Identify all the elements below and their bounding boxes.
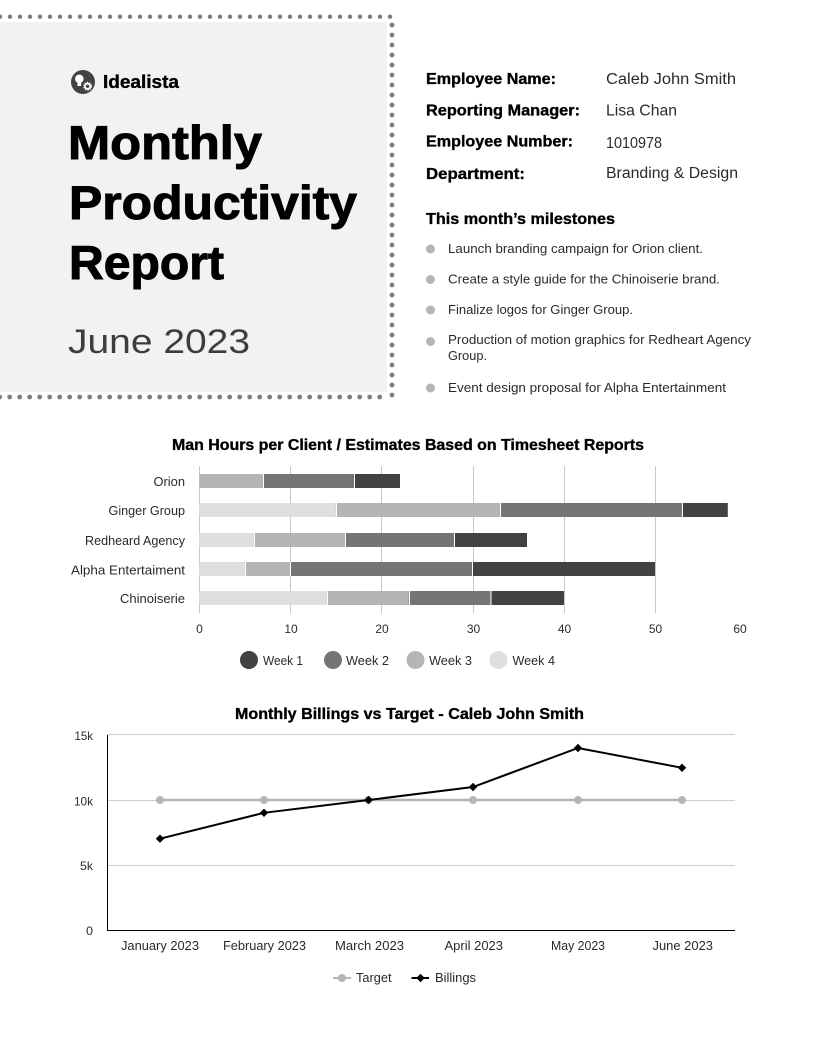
bar: Ginger Group [108, 503, 728, 518]
series: target [156, 796, 686, 804]
x axis labels: 30 [467, 622, 480, 636]
x axis labels: January 2023 [121, 939, 199, 953]
y axis labels [74, 729, 94, 938]
heading: man hours chart: Man Hours per Client / Estimates Based on Timesheet Reports [172, 437, 644, 454]
legend: target and billings [333, 971, 476, 985]
heading: billings chart: Monthly Billings vs Target - Caleb John Smith [235, 706, 584, 723]
milestones list: Launch branding campaign for Orion client. [448, 242, 703, 256]
x axis labels: February 2023 [223, 939, 306, 953]
legend: target and billings: Billings [435, 971, 476, 985]
x axis labels [196, 622, 747, 636]
stacked bar chart: man hours per client [71, 466, 747, 636]
bar: Chinoiserie [120, 591, 564, 606]
employee details: Caleb John Smith [606, 71, 736, 88]
header panel [0, 17, 392, 397]
legend: weeks: Week 2 [346, 654, 389, 668]
title: Monthly [68, 116, 262, 169]
employee details: Employee Number: [426, 134, 573, 151]
x axis labels: 20 [375, 622, 389, 636]
bar: Redheard Agency [85, 533, 527, 548]
y axis labels: 10k [74, 794, 94, 808]
line chart: monthly billings vs target [74, 729, 735, 953]
milestones list: Create a style guide for the Chinoiserie brand. [448, 272, 720, 286]
milestones list: Event design proposal for Alpha Entertainment [448, 381, 727, 395]
x axis labels: 0 [196, 622, 203, 636]
title: Report [69, 236, 224, 289]
employee details: 1010978 [606, 135, 662, 152]
bar: Alpha Entertaiment [71, 562, 655, 578]
x axis labels: April 2023 [444, 939, 503, 953]
legend: weeks [240, 651, 555, 669]
milestones list: Group. [448, 349, 487, 363]
bar: Ginger Group: Ginger Group [108, 504, 185, 518]
x axis labels [121, 939, 713, 953]
employee details: Department: [426, 166, 525, 183]
title [68, 116, 357, 289]
x axis labels: 50 [649, 622, 662, 636]
bar: Orion [154, 474, 400, 489]
legend: target and billings: Target [356, 971, 392, 985]
x axis labels: June 2023 [652, 939, 713, 953]
employee details: Employee Name: [426, 71, 556, 88]
milestones list [426, 242, 752, 395]
report date: June 2023 [68, 323, 250, 361]
title: Productivity [69, 176, 357, 229]
y axis labels: 5k [80, 859, 94, 873]
milestones list: Production of motion graphics for Redheart Agency [448, 333, 752, 347]
series: billings [156, 744, 686, 843]
icon: company logo [71, 70, 95, 94]
y axis labels: 0 [86, 924, 93, 938]
x axis labels: 10 [284, 622, 298, 636]
y axis labels: 15k [74, 729, 94, 743]
bar: Alpha Entertaiment: Alpha Entertaiment [71, 564, 186, 578]
employee details: Lisa Chan [606, 102, 677, 119]
employee details: Reporting Manager: [426, 102, 580, 119]
x axis labels: 40 [558, 622, 571, 636]
x axis labels: May 2023 [551, 939, 605, 953]
bar: Redheard Agency: Redheard Agency [85, 534, 186, 548]
company name: Idealista [103, 72, 180, 92]
x axis labels: 60 [733, 622, 747, 636]
employee details [426, 71, 738, 183]
milestones list: Finalize logos for Ginger Group. [448, 303, 633, 317]
legend: weeks: Week 4 [512, 654, 555, 668]
employee details: Branding & Design [606, 165, 738, 182]
bar: Chinoiserie: Chinoiserie [120, 592, 185, 606]
milestones heading: This month’s milestones [426, 211, 615, 228]
legend: weeks: Week 1 [263, 654, 303, 668]
x axis labels: March 2023 [335, 939, 404, 953]
legend: weeks: Week 3 [429, 654, 472, 668]
bar: Orion: Orion [154, 475, 185, 489]
